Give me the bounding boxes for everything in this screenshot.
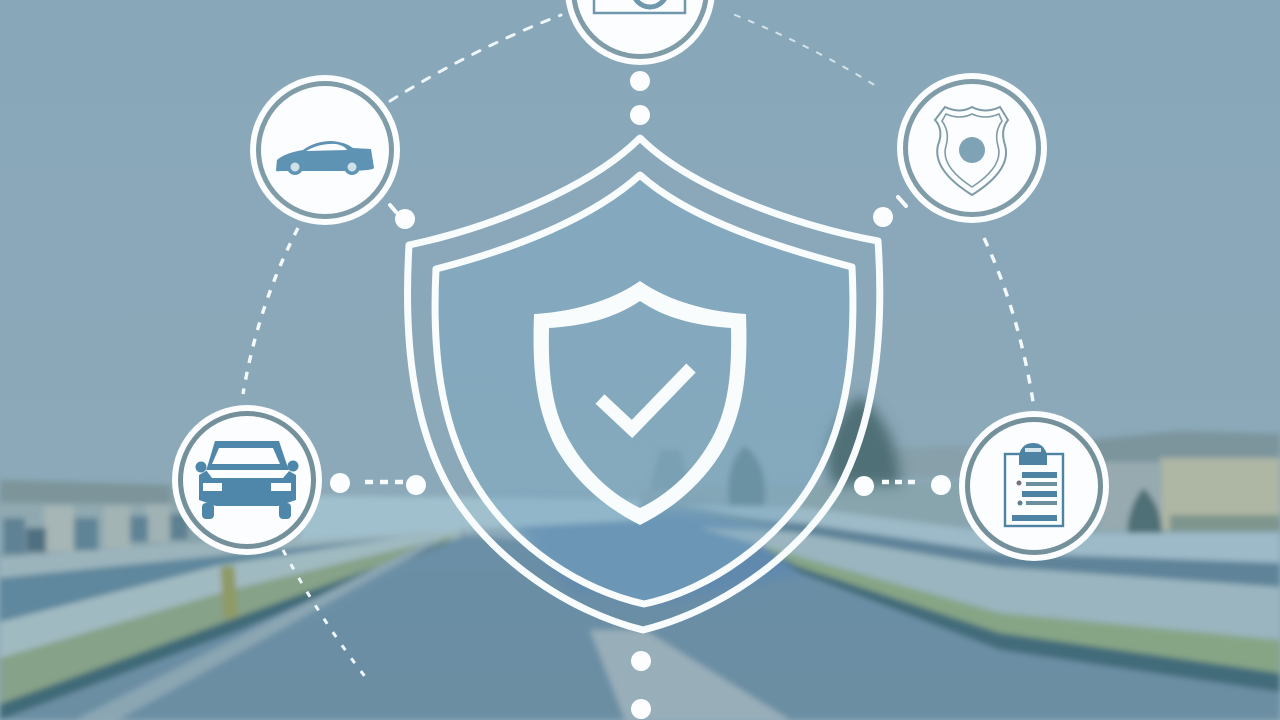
inner shield tint — [435, 175, 853, 604]
shield inner outline — [435, 175, 853, 604]
right horizon — [640, 470, 1280, 560]
left horizon — [0, 480, 470, 560]
icon: side view car — [276, 141, 374, 175]
icon: banknote camera — [594, 0, 685, 13]
bridge overlook left — [0, 504, 190, 552]
olive rail right — [760, 545, 1280, 673]
light rail right — [700, 528, 1280, 640]
snow bank — [300, 495, 640, 540]
small shield — [534, 281, 746, 525]
icon: police badge — [935, 107, 1008, 195]
olive rail left — [0, 534, 460, 706]
badge: camera top — [565, 0, 715, 65]
badge: side car — [250, 75, 400, 225]
dashed orbit: upper left — [390, 15, 561, 101]
connector dots — [330, 71, 951, 719]
shield outer outline — [407, 138, 880, 630]
connector dashes — [365, 197, 915, 482]
light rail left — [0, 528, 460, 660]
dark strip behind rail left — [0, 530, 470, 625]
badge: police shield — [897, 73, 1047, 223]
center line — [590, 630, 790, 720]
icon: front view car — [196, 441, 298, 519]
dashed orbit: upper right — [735, 15, 876, 86]
check mark — [600, 368, 691, 429]
blue road in shield — [500, 505, 870, 605]
far bank right — [680, 505, 1280, 565]
central shield — [407, 138, 880, 630]
badge: clipboard — [959, 411, 1109, 561]
road — [0, 535, 1280, 720]
badge: front car — [172, 405, 322, 555]
dashed orbit: left — [243, 228, 298, 394]
trees — [827, 395, 900, 485]
icon: clipboard — [1005, 443, 1063, 526]
dashed orbit: lower left — [283, 550, 370, 683]
dashed orbit: right — [984, 238, 1034, 408]
